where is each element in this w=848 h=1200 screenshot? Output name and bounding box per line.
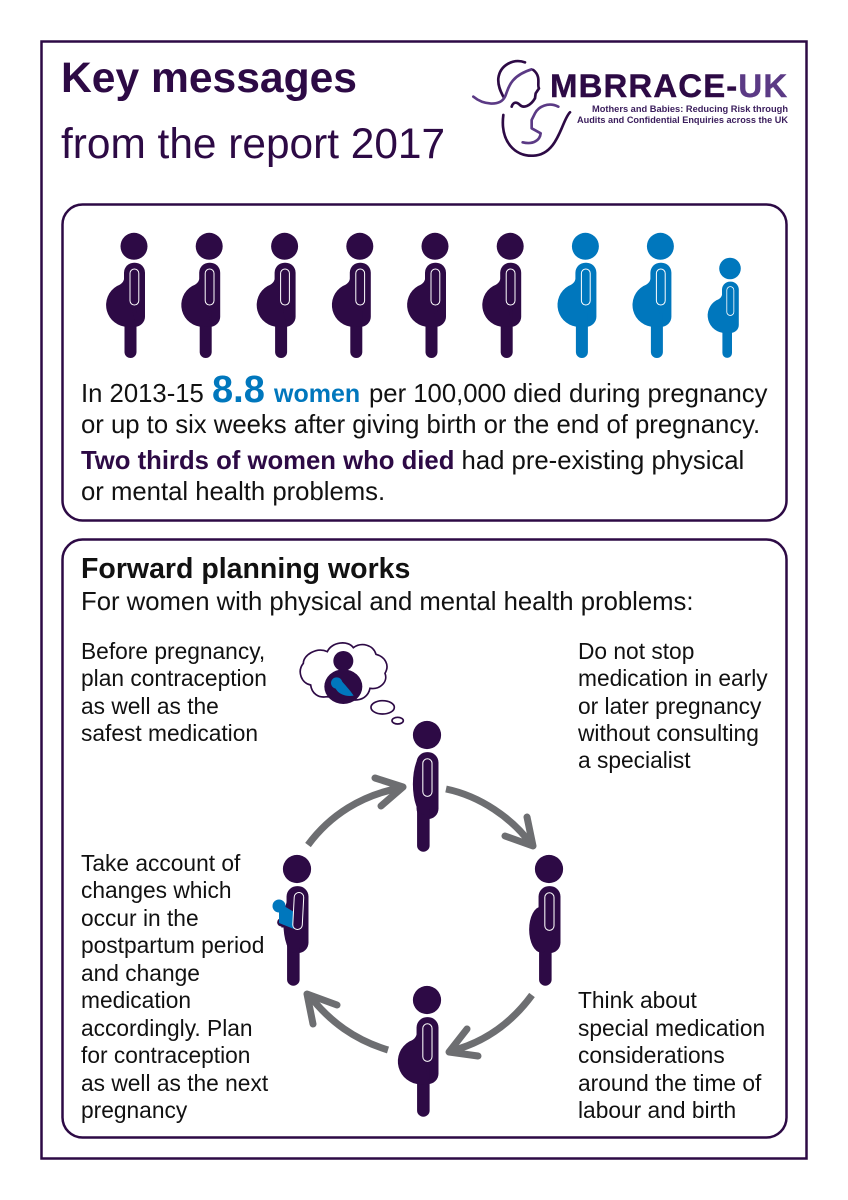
statistic text: In 2013-15	[81, 380, 204, 408]
text: postpartum: and change	[81, 960, 200, 986]
icon: baby	[272, 900, 294, 929]
icon: thought bubble	[300, 643, 403, 724]
figure: postpartum with baby	[272, 855, 311, 986]
arrow: top to right	[446, 789, 533, 846]
text: labour and birth: special medication	[578, 1015, 765, 1041]
panel heading: For women with physical and mental health problems:	[81, 588, 694, 616]
arrow: bottom to left	[307, 994, 388, 1050]
text: labour and birth: Think about	[578, 987, 698, 1013]
figure: early pregnancy	[413, 721, 441, 852]
text: do not stop medication: a specialist	[578, 747, 691, 773]
text: postpartum	[81, 850, 269, 1123]
statistic text: or mental health problems.	[81, 478, 385, 506]
text: do not stop medication: or later pregnancy	[578, 693, 762, 719]
text: do not stop medication: medication in early	[578, 665, 768, 691]
statistic text: 8.8	[212, 369, 265, 411]
text: labour and birth	[578, 987, 765, 1123]
figure: later pregnancy	[529, 855, 563, 986]
text: before pregnancy: safest medication	[81, 720, 258, 746]
logo tagline: Mothers and Babies: Reducing Risk through	[592, 104, 788, 115]
text: before pregnancy: Before pregnancy,	[81, 638, 265, 664]
statistic text: or up to six weeks after giving birth or the end of pregnancy.	[81, 411, 760, 439]
logo icon: mother and baby profile	[473, 61, 570, 156]
arrow: right to bottom	[449, 995, 532, 1056]
title	[61, 54, 445, 167]
arrow: left to top	[308, 778, 403, 845]
panel: maternal deaths	[62, 204, 786, 520]
text: postpartum: Take account of	[81, 850, 241, 876]
text: postpartum: changes which	[81, 877, 232, 903]
logo tagline	[577, 104, 788, 126]
panel: forward planning	[62, 540, 786, 1138]
text: do not stop medication: without consulting	[577, 720, 759, 746]
text: labour and birth: labour and birth	[578, 1097, 736, 1123]
pictogram: 8.8 women per 100,000	[106, 233, 741, 358]
text: postpartum: medication	[81, 987, 191, 1013]
statistic text: per 100,000 died during pregnancy	[369, 380, 768, 408]
text: before pregnancy: as well as the	[81, 693, 219, 719]
text: labour and birth: around the time of	[578, 1070, 762, 1096]
statistic text: Two thirds of women who died had pre-existing physical	[81, 447, 744, 475]
panel heading: Forward planning works	[81, 553, 410, 585]
logo: MBRRACE-UK	[473, 61, 788, 156]
text: before pregnancy	[81, 638, 267, 746]
text: postpartum: as well as the next	[81, 1070, 269, 1096]
statistic text: women	[273, 380, 360, 408]
text: postpartum: postpartum period	[81, 932, 264, 958]
panel heading	[81, 553, 694, 616]
title: from the report 2017	[61, 120, 445, 167]
text: before pregnancy: plan contraception	[81, 665, 267, 691]
text: do not stop medication: Do not stop	[578, 638, 694, 664]
statistic text	[81, 369, 768, 506]
text: postpartum: for contraception	[81, 1042, 250, 1068]
title: Key messages	[61, 54, 357, 102]
text: labour and birth: considerations	[578, 1042, 725, 1068]
figure: labour and birth	[398, 986, 441, 1117]
text: postpartum: occur in the	[81, 905, 199, 931]
text: do not stop medication	[577, 638, 768, 773]
logo tagline: Audits and Confidential Enquiries across the UK	[577, 115, 788, 126]
text: postpartum: pregnancy	[81, 1097, 188, 1123]
text: postpartum: accordingly. Plan	[81, 1015, 253, 1041]
logo wordmark: MBRRACE-UK	[550, 68, 788, 104]
